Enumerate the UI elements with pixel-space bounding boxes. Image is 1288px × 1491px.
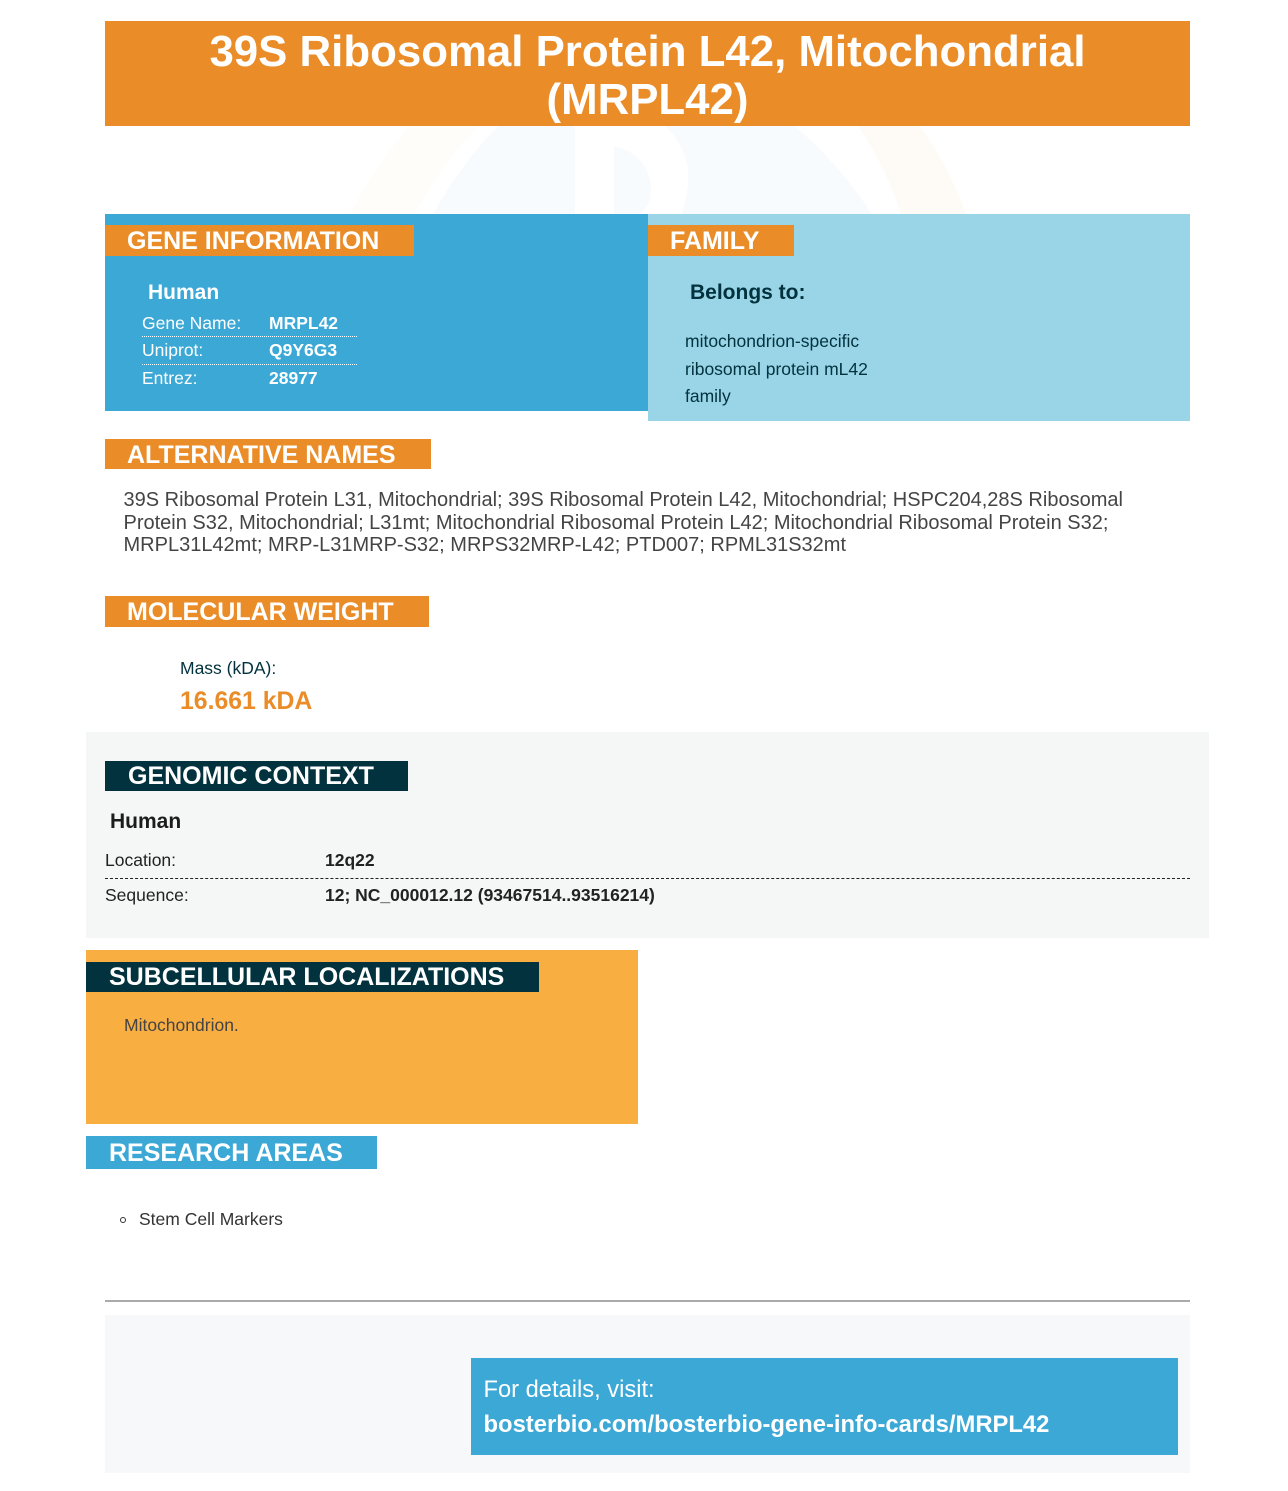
- gene table: Uniprot:: [142, 340, 203, 360]
- location row: Location:: [105, 850, 176, 870]
- heading: subcellular localizations: SUBCELLULAR LOCALIZATIONS: [109, 963, 504, 991]
- label: belongs to: Belongs to:: [690, 281, 806, 304]
- callout: details link: [471, 1358, 1178, 1455]
- alternative names text: MRPL31L42mt; MRP-L31MRP-S32; MRPS32MRP-L42; PTD007; RPML31S32mt: [124, 534, 846, 556]
- gene table: 28977: [269, 368, 318, 388]
- panel: gene information: [105, 214, 648, 411]
- localization text: Mitochondrion.: [124, 1015, 239, 1035]
- heading: family: [648, 225, 794, 256]
- panel: subcellular localizations: [86, 950, 638, 1124]
- callout: details link: For details, visit:: [484, 1377, 655, 1403]
- callout: details link: bosterbio.com/bosterbio-gene-info-cards/MRPL42: [484, 1411, 1049, 1438]
- panel: family: [648, 214, 1190, 421]
- watermark logo: [858, 126, 966, 214]
- title banner: [105, 21, 1190, 126]
- heading: genomic context: GENOMIC CONTEXT: [128, 762, 374, 790]
- family description: ribosomal protein mL42: [685, 358, 868, 378]
- heading: alternative names: ALTERNATIVE NAMES: [127, 441, 396, 469]
- alternative names text: Protein S32, Mitochondrial; L31mt; Mitochondrial Ribosomal Protein L42; Mitochondrial Ribosomal Protein S32;: [124, 512, 1108, 534]
- sequence row: [105, 885, 655, 905]
- family description: family: [685, 386, 731, 406]
- label: human: Human: [110, 810, 181, 833]
- mass value: 16.661 kDA: [180, 688, 312, 715]
- gene table: Gene Name:: [142, 313, 241, 333]
- mass label: Mass (kDA):: [180, 658, 276, 678]
- heading: family: FAMILY: [670, 227, 759, 255]
- family description: mitochondrion-specific: [685, 331, 859, 351]
- label: human: Human: [148, 281, 219, 304]
- research areas list: Stem Cell Markers: [139, 1209, 283, 1229]
- heading: research areas: [86, 1136, 377, 1169]
- gene table: MRPL42: [269, 313, 338, 333]
- location row: [105, 850, 375, 870]
- gene table: [142, 313, 357, 388]
- alternative names text: 39S Ribosomal Protein L31, Mitochondrial; 39S Ribosomal Protein L42, Mitochondrial; HSPC204,28S Ribosomal: [124, 489, 1123, 511]
- gene table: Entrez:: [142, 368, 197, 388]
- title banner: 39S Ribosomal Protein L42, Mitochondrial: [209, 27, 1086, 76]
- heading: gene information: GENE INFORMATION: [127, 227, 379, 255]
- footer panel: [105, 1315, 1190, 1473]
- panel: genomic context: [86, 732, 1209, 938]
- sequence row: 12; NC_000012.12 (93467514..93516214): [325, 885, 655, 905]
- heading: research areas: RESEARCH AREAS: [109, 1139, 343, 1167]
- alternative names text: [124, 489, 1123, 556]
- location row: 12q22: [325, 850, 375, 870]
- title banner: (MRPL42): [547, 75, 748, 124]
- family description: [685, 331, 868, 406]
- gene table: Q9Y6G3: [269, 340, 337, 360]
- sequence row: Sequence:: [105, 885, 189, 905]
- heading: molecular weight: MOLECULAR WEIGHT: [127, 598, 394, 626]
